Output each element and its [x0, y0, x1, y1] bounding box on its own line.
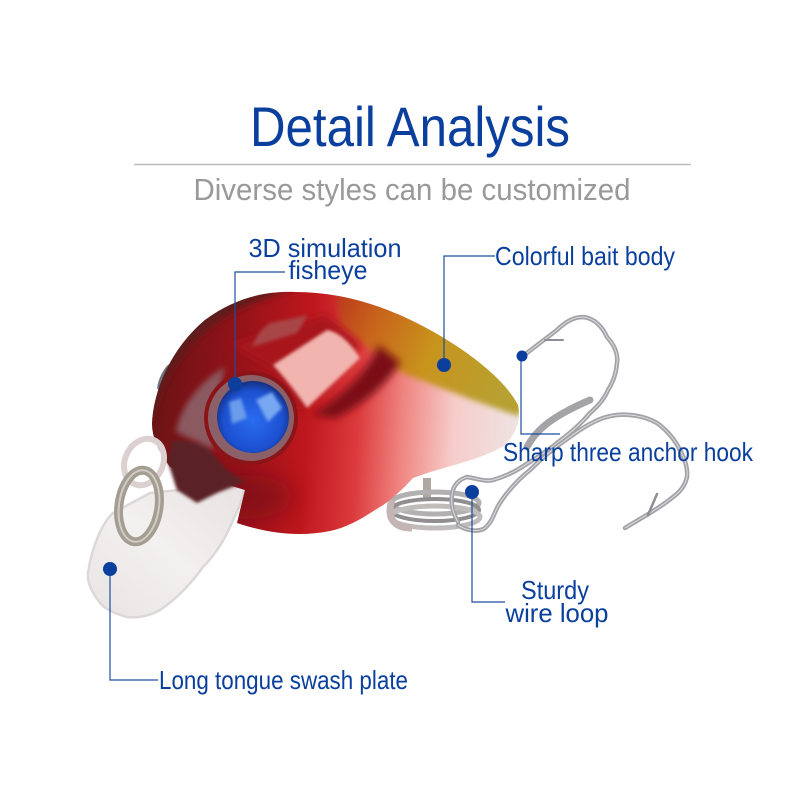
- marker dots: [103, 350, 528, 576]
- tongue swash plate: [88, 483, 245, 617]
- back eye: [155, 363, 173, 391]
- split ring: [114, 468, 164, 544]
- label: sturdy wire loop: wire loop: [505, 598, 608, 628]
- gold back: [334, 295, 519, 420]
- label: sturdy wire loop: Sturdy: [521, 575, 589, 605]
- label: colorful bait body: Colorful bait body: [495, 241, 675, 271]
- body window highlight: [273, 330, 360, 408]
- eye socket: [176, 367, 225, 450]
- label: 3D simulation fisheye: [248, 233, 402, 285]
- rear hooks: [452, 317, 687, 531]
- line tie loop: [117, 432, 171, 492]
- mouth: [168, 440, 245, 503]
- red zone above eye: [230, 315, 360, 410]
- label: sharp three anchor hook: Sharp three anchor hook: [503, 437, 754, 467]
- label: long tongue swash plate: Long tongue swash plate: [159, 665, 408, 695]
- title: Detail Analysis: [250, 95, 570, 158]
- label: sturdy wire loop: [505, 575, 608, 628]
- dark top shading: [152, 292, 294, 421]
- lower shading: [197, 475, 293, 519]
- lure illustration: [88, 280, 687, 617]
- label: 3D simulation fisheye: 3D simulation: [248, 233, 402, 263]
- iris facets: [229, 398, 247, 424]
- lure body: [152, 292, 519, 534]
- eye: [204, 371, 298, 465]
- dark band under gold: [312, 345, 400, 418]
- subtitle: Diverse styles can be customized: [194, 172, 630, 207]
- upper highlight: [252, 315, 308, 347]
- leader lines: [110, 256, 560, 680]
- rear split ring: [390, 478, 480, 528]
- label: 3D simulation fisheye: fisheye: [288, 255, 368, 285]
